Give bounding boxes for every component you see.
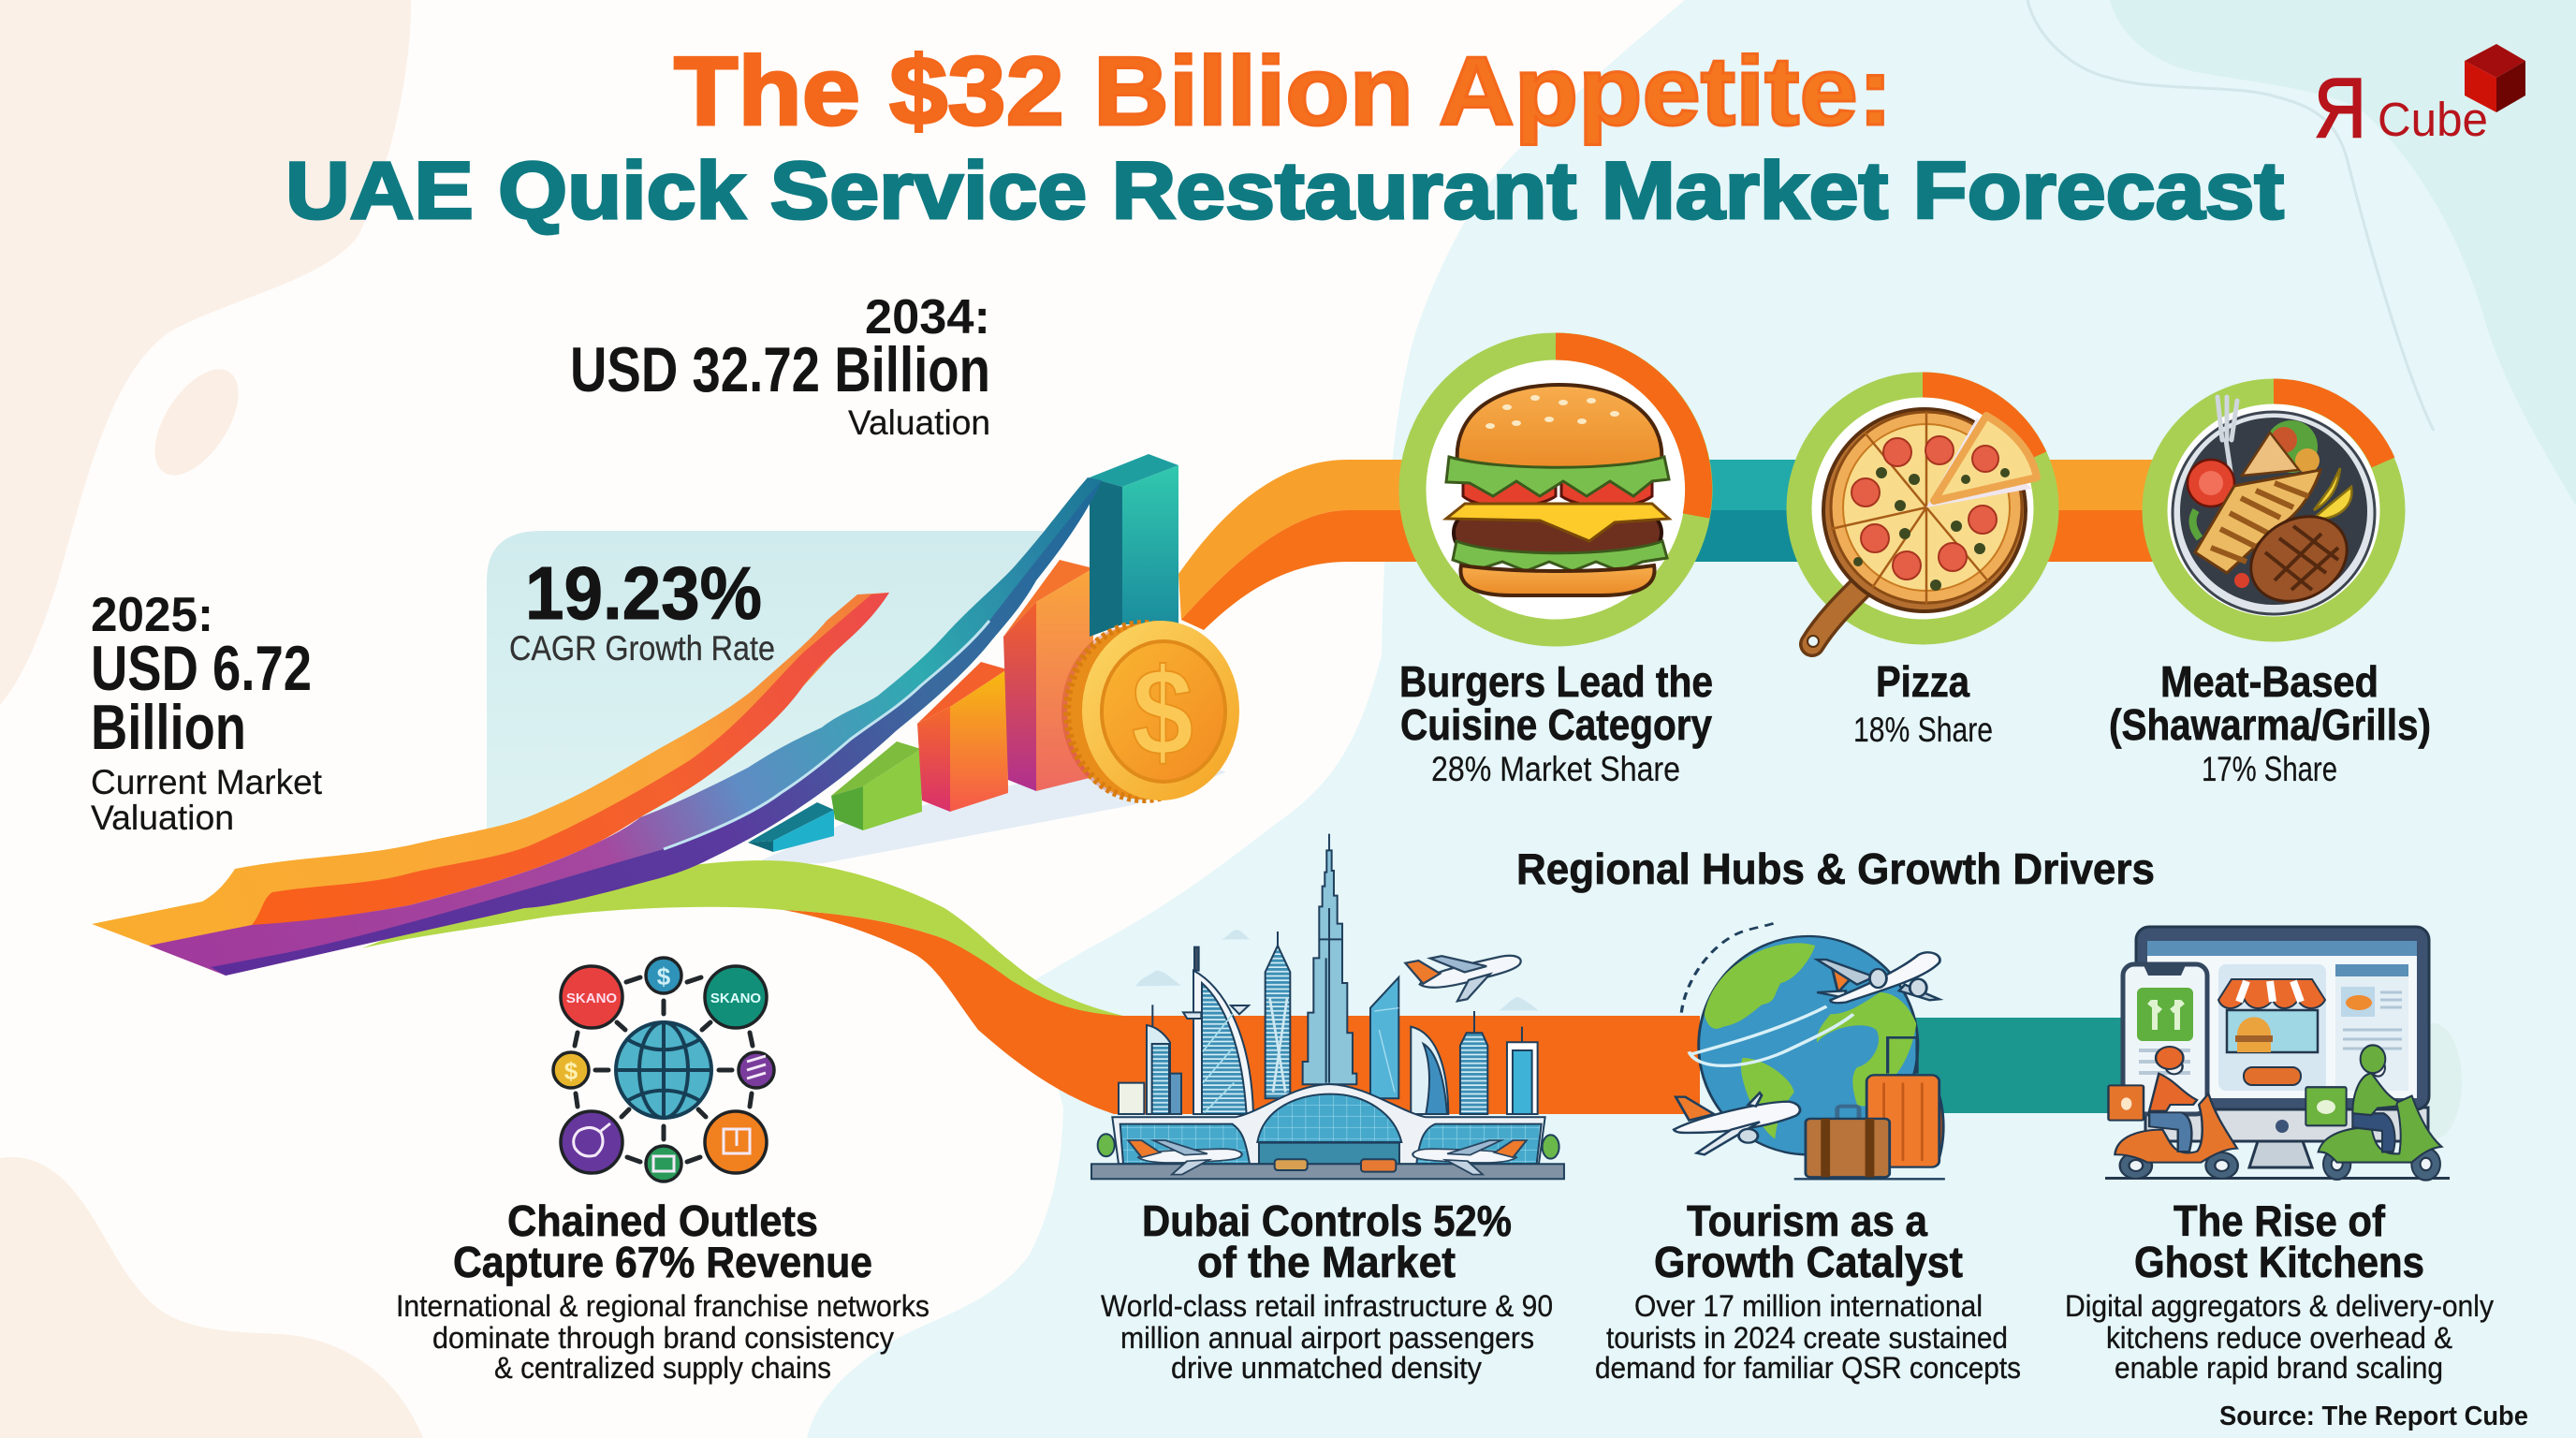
network: node labels: SKANO bbox=[710, 990, 761, 1006]
logo: RCube bbox=[2314, 44, 2525, 155]
text: ghost kitchens bbox=[2065, 1196, 2494, 1385]
skyline: striped tower bbox=[1460, 1033, 1487, 1114]
chart: growth ribbons bbox=[92, 477, 1102, 976]
scooter: green bbox=[2305, 1045, 2441, 1181]
band: orange sweep bbox=[1178, 460, 1432, 620]
pizza: pepperoni bbox=[1852, 436, 1997, 580]
text: burgers: Burgers Lead the bbox=[1399, 657, 1713, 706]
bar: orange bbox=[917, 662, 1008, 812]
text: chained outlets bbox=[396, 1196, 929, 1385]
globe: dotted route bbox=[1681, 922, 1777, 1013]
panel: CAGR backdrop bbox=[487, 531, 1044, 857]
salad bbox=[2265, 420, 2320, 473]
text: tourism: Growth Catalyst bbox=[1654, 1238, 1963, 1286]
scooter: orange bbox=[2108, 1047, 2238, 1179]
text: chained outlets: dominate through brand consistency bbox=[432, 1321, 894, 1355]
ribbon: red-orange bbox=[252, 593, 889, 927]
shop: awning bbox=[2218, 979, 2325, 1008]
text: Dubai: Dubai Controls 52% bbox=[1142, 1196, 1512, 1245]
text: burgers: 28% Market Share bbox=[1431, 750, 1680, 788]
title line 2: UAE Quick Service Restaurant Market Forecast bbox=[285, 146, 2284, 236]
burger: tomato bbox=[1463, 473, 1652, 506]
monitor: stand bbox=[2249, 1141, 2312, 1167]
text: ghost kitchens: The Rise of bbox=[2174, 1196, 2386, 1245]
text: ghost kitchens: enable rapid brand scaling bbox=[2115, 1351, 2443, 1385]
pizza: cut lines bbox=[1831, 412, 1989, 604]
heading: regional hubs: Regional Hubs & Growth Drivers bbox=[1516, 844, 2155, 893]
stat: CAGR: 19.23% bbox=[525, 551, 762, 635]
network: node labels bbox=[564, 962, 761, 1085]
icon: globe with travel bbox=[1674, 922, 1945, 1179]
shop: order button bbox=[2244, 1067, 2301, 1085]
lower flow band: orange bbox=[783, 910, 1700, 1114]
text: tourism: demand for familiar QSR concepts bbox=[1595, 1351, 2021, 1385]
icon: burger ring bbox=[1412, 346, 1699, 633]
phone: app card bbox=[2137, 988, 2193, 1041]
ribbon: dark lower edge bbox=[211, 480, 1102, 976]
bread bbox=[2242, 433, 2299, 476]
text: meat-based: Meat-Based bbox=[2160, 657, 2378, 706]
skyline: twisted tower bbox=[1266, 946, 1290, 1098]
source note: Source: The Report Cube bbox=[2219, 1401, 2528, 1431]
text: Dubai bbox=[1101, 1196, 1553, 1385]
wrap bbox=[2195, 470, 2320, 573]
text: Dubai: million annual airport passengers bbox=[1120, 1321, 1534, 1355]
background: peach oval bbox=[138, 355, 256, 490]
icon: ground plane right bbox=[1412, 1140, 1527, 1174]
pizza: base bbox=[1831, 412, 2022, 603]
pizza: olives bbox=[1853, 467, 1985, 591]
background: thin contour line bbox=[2027, 0, 2434, 431]
text: tourism: tourists in 2024 create sustained bbox=[1606, 1321, 2008, 1355]
background: upper-left peach blob bbox=[0, 0, 411, 705]
stat: 2034 valuation: USD 32.72 Billion bbox=[570, 334, 990, 405]
stat: 2034 valuation: Valuation bbox=[848, 404, 990, 442]
burger: lettuce bbox=[1446, 457, 1669, 496]
bar: smallest teal bbox=[748, 802, 834, 852]
globe: land bbox=[1705, 943, 1916, 1139]
network: connectors bbox=[575, 977, 753, 1162]
plate bbox=[2173, 412, 2375, 614]
text: chained outlets: & centralized supply chains bbox=[494, 1351, 831, 1385]
network: node labels: $ bbox=[564, 1057, 578, 1085]
text: meat-based: (Shawarma/Grills) bbox=[2109, 700, 2431, 749]
text: Dubai: of the Market bbox=[1197, 1238, 1456, 1286]
burger: lower lettuce bbox=[1453, 541, 1667, 571]
burger: patty bbox=[1454, 511, 1661, 554]
suitcase: brown bbox=[1806, 1107, 1890, 1177]
text: pizza bbox=[1853, 657, 1993, 749]
stat: 2025 valuation: Current Market bbox=[91, 763, 323, 801]
icon: ground plane left bbox=[1128, 1140, 1242, 1174]
icon: gold dollar coin: $ bbox=[1132, 643, 1193, 781]
text: meat-based bbox=[2109, 657, 2431, 788]
icon: Dubai skyline and airport bbox=[1091, 834, 1564, 1179]
shop panel bbox=[2218, 964, 2326, 1091]
text: tourism: Tourism as a bbox=[1687, 1196, 1927, 1245]
skyline: square tower bbox=[1507, 1042, 1538, 1114]
band: orange segment lower bbox=[2041, 510, 2162, 562]
lower flow band: green bbox=[362, 860, 1123, 1016]
ground line bbox=[1794, 1176, 1945, 1182]
background: upper-right teal blob bbox=[2110, 0, 2576, 506]
monitor: frame bbox=[2136, 927, 2429, 1109]
ground line bbox=[2105, 1177, 2450, 1180]
burger: sesame seeds bbox=[1486, 395, 1619, 429]
network: small glyphs bbox=[574, 1056, 766, 1171]
pizza: lifted slice bbox=[1934, 416, 2037, 501]
bar: green bbox=[831, 741, 922, 830]
icon: sky plane bbox=[1405, 942, 1526, 1009]
icon: pizza ring bbox=[1799, 385, 2046, 647]
ribbon: yellow-orange bbox=[92, 593, 889, 946]
band: teal segment upper bbox=[1685, 460, 1807, 510]
network: nodes bbox=[553, 958, 774, 1181]
stat: CAGR: CAGR Growth Rate bbox=[509, 629, 775, 668]
lemons bbox=[2312, 468, 2351, 520]
text: burgers bbox=[1399, 657, 1713, 788]
airport: ground bbox=[1091, 1164, 1564, 1179]
upper flow band bbox=[1178, 460, 2162, 630]
suitcase: orange bbox=[1866, 1037, 1943, 1167]
text: pizza: Pizza bbox=[1876, 657, 1969, 706]
text: meat-based: 17% Share bbox=[2202, 750, 2337, 788]
stat: 2025 valuation bbox=[91, 588, 323, 837]
chart: floor shadow bbox=[749, 749, 1226, 866]
logo: RCube: Я bbox=[2314, 62, 2366, 155]
band: dark orange sweep bbox=[1181, 510, 1432, 630]
fork bbox=[2217, 397, 2237, 477]
background: lower-left peach blob bbox=[0, 1157, 423, 1438]
logo: RCube: Cube bbox=[2378, 93, 2488, 146]
ribbon: purple to teal bbox=[149, 477, 1102, 976]
airport: trees bbox=[1098, 1134, 1559, 1159]
band: teal segment lower bbox=[1685, 510, 1807, 562]
icon: meat plate ring bbox=[2155, 391, 2393, 629]
monitor: screen bbox=[2147, 941, 2417, 1098]
stat: CAGR bbox=[509, 551, 775, 668]
network: node labels: SKANO bbox=[566, 990, 617, 1006]
icon: gold dollar coin bbox=[1061, 621, 1239, 800]
text: burgers: Cuisine Category bbox=[1400, 700, 1712, 749]
ribbon: light divider bbox=[664, 621, 989, 849]
icon: ghost kitchen monitor and scooters bbox=[2105, 927, 2462, 1181]
stat: 2025 valuation: USD 6.72 bbox=[91, 633, 312, 704]
stat: 2025 valuation: Billion bbox=[91, 692, 246, 763]
text: tourism: Over 17 million international bbox=[1634, 1289, 1983, 1323]
shop: burger bbox=[2235, 1017, 2273, 1052]
airport: cars bbox=[1275, 1159, 1396, 1172]
airport: roof and wings bbox=[1112, 1084, 1545, 1164]
shop: window bbox=[2227, 1010, 2318, 1052]
band: orange segment upper bbox=[2041, 460, 2162, 510]
skyline: curved tower bbox=[1411, 1027, 1448, 1114]
skyline: right sail bbox=[1370, 977, 1398, 1098]
text: Dubai: World-class retail infrastructure & 90 bbox=[1101, 1289, 1553, 1323]
plane: bottom left bbox=[1674, 1093, 1800, 1154]
plane: top right bbox=[1817, 952, 1939, 1003]
text: chained outlets: Capture 67% Revenue bbox=[453, 1238, 872, 1286]
burger: bottom bun bbox=[1460, 565, 1655, 595]
pizza: slice gap bbox=[1926, 418, 2031, 507]
skyline: clouds bbox=[1135, 930, 1538, 1010]
text: tourism bbox=[1595, 1196, 2021, 1385]
skyline: left tower bbox=[1147, 1025, 1170, 1114]
title bbox=[285, 37, 2284, 236]
title line 1: The $32 Billion Appetite: bbox=[674, 37, 1893, 146]
menu panel bbox=[2335, 964, 2408, 1091]
stat: 2025 valuation: 2025: bbox=[91, 588, 213, 642]
stat: 2025 valuation: Valuation bbox=[91, 799, 234, 837]
stat: 2034 valuation bbox=[570, 290, 990, 442]
bar: tallest teal bbox=[1090, 454, 1178, 637]
chart: 3D bars bbox=[748, 454, 1178, 852]
text: ghost kitchens: Ghost Kitchens bbox=[2134, 1238, 2424, 1286]
globe: flight trails bbox=[1689, 1006, 1853, 1065]
burger: top bun bbox=[1457, 385, 1661, 474]
burger: cheese bbox=[1446, 504, 1669, 541]
phone bbox=[2123, 964, 2207, 1114]
skyline: Burj Khalifa bbox=[1303, 834, 1356, 1084]
pizza: paddle bbox=[1812, 585, 1863, 644]
steak bbox=[2235, 500, 2363, 618]
monitor: chin bbox=[2145, 1108, 2428, 1141]
airport: centre dome bbox=[1257, 1094, 1401, 1142]
stat: 2034 valuation: 2034: bbox=[865, 290, 990, 345]
tomato bbox=[2188, 460, 2234, 506]
skyline: Burj Al Arab bbox=[1193, 971, 1253, 1114]
text: pizza: 18% Share bbox=[1853, 711, 1993, 749]
globe: sphere bbox=[1699, 936, 1918, 1154]
bar: tall orange bbox=[1003, 560, 1093, 791]
text: ghost kitchens: kitchens reduce overhead & bbox=[2106, 1321, 2452, 1355]
icon: franchise network bbox=[553, 958, 774, 1181]
text: chained outlets: International & regional franchise networks bbox=[396, 1289, 929, 1323]
background: light blue field bbox=[807, 0, 2576, 1438]
network: node labels: $ bbox=[657, 962, 671, 990]
text: chained outlets: Chained Outlets bbox=[507, 1196, 818, 1245]
text: Dubai: drive unmatched density bbox=[1171, 1351, 1482, 1385]
network: globe bbox=[616, 1022, 711, 1118]
lower flow band: teal segment bbox=[1900, 1018, 2134, 1113]
airport: wing glass bbox=[1120, 1124, 1542, 1164]
text: ghost kitchens: Digital aggregators & delivery-only bbox=[2065, 1289, 2494, 1323]
backdrop circle bbox=[2406, 1023, 2462, 1139]
